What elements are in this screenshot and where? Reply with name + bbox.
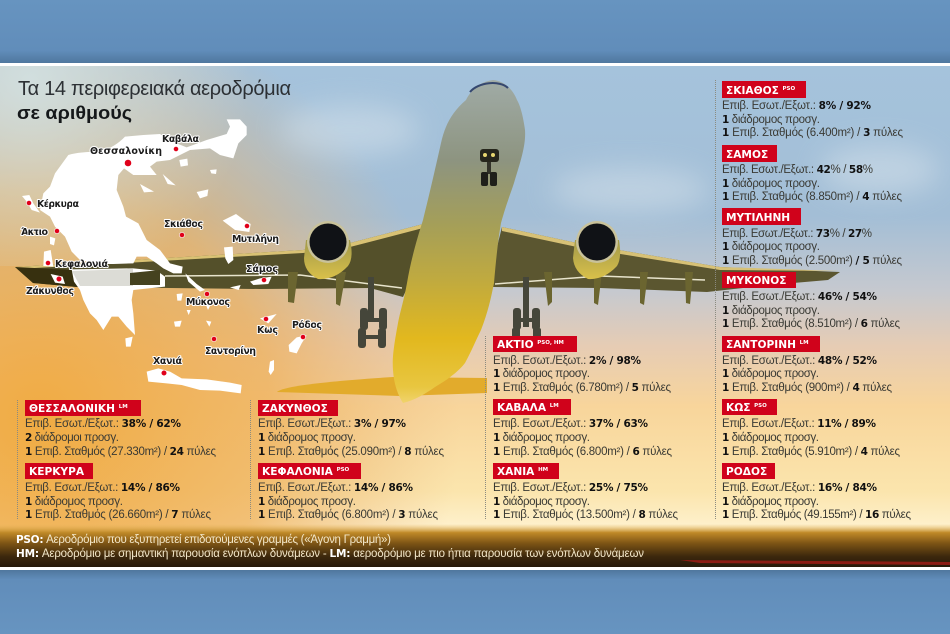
card: Καβάλα [493, 399, 672, 458]
card: Θεσσαλονίκη: Επιβ. Εσωτ./Εξωτ.: 38% / 62% [25, 418, 181, 430]
map labels: Σαντορίνη [205, 346, 256, 357]
left engine [304, 221, 352, 279]
card: Άκτιο: ΑΚΤΙΟ [497, 339, 534, 351]
Samos and Ikaria [230, 277, 272, 290]
card: Κεφαλονιά: Επιβ. Εσωτ./Εξωτ.: 14% / 86% [258, 482, 413, 494]
card: Κεφαλονιά: PSO [337, 467, 350, 473]
airplane [15, 80, 840, 403]
card: Χανιά: 1 διάδρομος προσγ. [493, 496, 590, 508]
right landing gear [512, 277, 541, 338]
Kefalonia [43, 250, 53, 267]
card: Σκιάθος: 1 Επιβ. Σταθμός (6.400m²) / 3 πύλες [722, 127, 903, 139]
card: Κεφαλονιά: 1 διάδρομος προσγ. [258, 496, 356, 508]
card: Κως [722, 399, 900, 458]
card: Ρόδος: Επιβ. Εσωτ./Εξωτ.: 16% / 84% [722, 482, 877, 494]
map labels: Άκτιο [21, 227, 48, 238]
card: Ζάκυνθος [258, 400, 444, 458]
map labels: Σκιάθος [164, 219, 203, 230]
Corfu [22, 195, 40, 213]
card: Σάμος: 1 διάδρομος προσγ. [722, 178, 820, 190]
background sky [0, 66, 950, 567]
card: Θεσσαλονίκη: 2 διάδρομοι προσγ. [25, 432, 119, 444]
right engine [573, 221, 620, 279]
legend notes: HM: Αεροδρόμιο με σημαντική παρουσία ενόπλων δυνάμεων - LM: αεροδρόμιο με πιο ήπια παρουσία των ενόπλων δυνάμεων [16, 548, 644, 560]
map labels: Καβάλα [162, 134, 199, 145]
card: Μύκονος: 1 διάδρομος προσγ. [722, 305, 820, 317]
wing seen through map [72, 269, 160, 286]
card: Μύκονος: ΜΥΚΟΝΟΣ [726, 275, 787, 287]
card: Σάμος [722, 145, 902, 203]
card: Κέρκυρα: 1 Επιβ. Σταθμός (26.660m²) / 7 πύλες [25, 509, 211, 521]
card: Σαντορίνη: ΣΑΝΤΟΡΙΝΗ [726, 339, 796, 351]
card: Άκτιο [493, 336, 671, 394]
card: Κως: PSO [754, 403, 767, 409]
card: Κέρκυρα: 1 διάδρομος προσγ. [25, 496, 123, 508]
card: Μύκονος [722, 272, 900, 330]
map labels: Κεφαλονιά [55, 259, 108, 270]
card: Σαντορίνη: Επιβ. Εσωτ./Εξωτ.: 48% / 52% [722, 355, 877, 367]
card: Κέρκυρα [25, 463, 211, 521]
legend notes [16, 534, 644, 560]
card: Χανιά: ΧΑΝΙΑ [497, 466, 534, 478]
card: Σαντορίνη [722, 336, 892, 394]
card: Σκιάθος: Επιβ. Εσωτ./Εξωτ.: 8% / 92% [722, 100, 871, 112]
card: Θεσσαλονίκη: 1 Επιβ. Σταθμός (27.330m²) / 24 πύλες [25, 446, 216, 458]
card: Μυτιλήνη: Επιβ. Εσωτ./Εξωτ.: 73% / 27% [722, 228, 872, 240]
map labels: Κως [257, 325, 278, 336]
card: Καβάλα: LM [550, 403, 559, 409]
card: Άκτιο: 1 Επιβ. Σταθμός (6.780m²) / 5 πύλες [493, 382, 671, 394]
Kythira [125, 337, 133, 347]
card: Ρόδος: 1 Επιβ. Σταθμός (49.155m²) / 16 πύλες [722, 509, 911, 521]
card: Χανιά: Επιβ. Εσωτ./Εξωτ.: 25% / 75% [493, 482, 648, 494]
map labels: Χανιά [153, 356, 182, 367]
card: Καβάλα: 1 διάδρομος προσγ. [493, 432, 590, 444]
card: Κεφαλονιά [258, 463, 438, 521]
map of Greece [22, 119, 307, 393]
card: Σκιάθος [722, 81, 903, 139]
card: Χανιά: 1 Επιβ. Σταθμός (13.500m²) / 8 πύλες [493, 509, 678, 521]
card: Χανιά [493, 463, 678, 521]
card: Κέρκυρα: ΚΕΡΚΥΡΑ [29, 466, 85, 478]
card: Ρόδος: ΡΟΔΟΣ [726, 466, 767, 478]
map labels: Μύκονος [186, 297, 230, 308]
column dividers [18, 80, 716, 520]
Lesvos [223, 214, 251, 232]
card: Κως: ΚΩΣ [726, 402, 750, 414]
map labels: Μυτιλήνη [232, 234, 279, 245]
ground strip [0, 524, 950, 567]
marker dots [26, 146, 306, 376]
right wing [493, 227, 840, 292]
Zakynthos [51, 274, 65, 284]
card: Μυτιλήνη: 1 Επιβ. Σταθμός (2.500m²) / 5 πύλες [722, 255, 902, 267]
card: Ρόδος: 1 διάδρομος προσγ. [722, 496, 819, 508]
card: Ζάκυνθος: Επιβ. Εσωτ./Εξωτ.: 3% / 97% [258, 418, 406, 430]
card: Σάμος: 1 Επιβ. Σταθμός (8.850m²) / 4 πύλες [722, 191, 902, 203]
card: Θεσσαλονίκη: LM [119, 404, 128, 410]
map labels: Κέρκυρα [37, 199, 79, 210]
card: Καβάλα: ΚΑΒΑΛΑ [497, 402, 546, 414]
card: Κέρκυρα: Επιβ. Εσωτ./Εξωτ.: 14% / 86% [25, 482, 180, 494]
card: Σαντορίνη: 1 διάδρομος προσγ. [722, 368, 819, 380]
map labels [21, 134, 322, 376]
card: Κως: Επιβ. Εσωτ./Εξωτ.: 11% / 89% [722, 418, 876, 430]
card: Άκτιο: Επιβ. Εσωτ./Εξωτ.: 2% / 98% [493, 355, 641, 367]
card: Σαντορίνη: LM [800, 340, 809, 346]
nose landing gear [480, 149, 499, 186]
Rhodes [289, 335, 307, 353]
fuselage [393, 80, 525, 403]
card: Σαντορίνη: 1 Επιβ. Σταθμός (900m²) / 4 πύλες [722, 382, 892, 394]
wing flap fairings [288, 272, 693, 306]
card: Σκιάθος: ΣΚΙΑΘΟΣ [726, 85, 779, 97]
card: Κεφαλονιά: ΚΕΦΑΛΟΝΙΑ [262, 466, 333, 478]
card: Θεσσαλονίκη [25, 400, 216, 458]
map labels: Ρόδος [292, 320, 322, 331]
Chios [224, 247, 233, 264]
legend notes: PSO: Αεροδρόμιο που εξυπηρετεί επιδοτούμενες γραμμές («Άγονη Γραμμή») [16, 534, 391, 546]
card: Ζάκυνθος: ΖΑΚΥΝΘΟΣ [262, 403, 328, 415]
card: Σκιάθος: PSO [783, 86, 796, 92]
card: Χανιά: HM [538, 467, 548, 473]
mainland [40, 119, 247, 273]
card: Κως: 1 Επιβ. Σταθμός (5.910m²) / 4 πύλες [722, 446, 900, 458]
top blue band [0, 0, 950, 63]
card: Καβάλα: Επιβ. Εσωτ./Εξωτ.: 37% / 63% [493, 418, 648, 430]
card: Μυτιλήνη: 1 διάδρομος προσγ. [722, 241, 820, 253]
card: Σκιάθος: 1 διάδρομος προσγ. [722, 114, 820, 126]
Kos [260, 314, 277, 323]
card: Μύκονος: 1 Επιβ. Σταθμός (8.510m²) / 6 πύλες [722, 318, 900, 330]
Karpathos [269, 360, 274, 375]
Thasos and Samothraki [179, 159, 217, 174]
Cyclades [174, 273, 211, 327]
title: Τα 14 περιφερειακά αεροδρόμια [18, 78, 291, 100]
card: Ζάκυνθος: 1 διάδρομος προσγ. [258, 432, 356, 444]
card: Μύκονος: Επιβ. Εσωτ./Εξωτ.: 46% / 54% [722, 291, 877, 303]
card: Κως: 1 διάδρομος προσγ. [722, 432, 819, 444]
left wing [15, 223, 427, 297]
card: Σάμος: ΣΑΜΟΣ [726, 149, 768, 161]
card: Καβάλα: 1 Επιβ. Σταθμός (6.800m²) / 6 πύλες [493, 446, 672, 458]
card: Ζάκυνθος: 1 Επιβ. Σταθμός (25.090m²) / 8 πύλες [258, 446, 444, 458]
tail stabilizer [277, 377, 487, 396]
card: Άκτιο: PSO, HM [537, 340, 564, 346]
card: Μυτιλήνη [722, 208, 902, 267]
Lefkada [50, 237, 55, 245]
map labels: Θεσσαλονίκη [90, 146, 162, 157]
Peloponnese [72, 268, 165, 335]
card: Μυτιλήνη: ΜΥΤΙΛΗΝΗ [726, 212, 790, 224]
card: Ρόδος [722, 463, 911, 521]
map labels: Ζάκυνθος [26, 286, 74, 297]
Crete [147, 368, 242, 393]
Lemnos [197, 189, 208, 198]
card: Θεσσαλονίκη: ΘΕΣΣΑΛΟΝΙΚΗ [29, 403, 115, 415]
map labels: Σάμος [246, 264, 278, 275]
card: Κεφαλονιά: 1 Επιβ. Σταθμός (6.800m²) / 3 πύλες [258, 509, 438, 521]
bottom blue band [0, 570, 950, 634]
left landing gear [358, 277, 387, 348]
card: Σάμος: Επιβ. Εσωτ./Εξωτ.: 42% / 58% [722, 164, 873, 176]
title: σε αριθμούς [17, 102, 132, 123]
card: Άκτιο: 1 διάδρομος προσγ. [493, 368, 590, 380]
title [17, 78, 291, 123]
Chalkidiki [140, 174, 176, 192]
